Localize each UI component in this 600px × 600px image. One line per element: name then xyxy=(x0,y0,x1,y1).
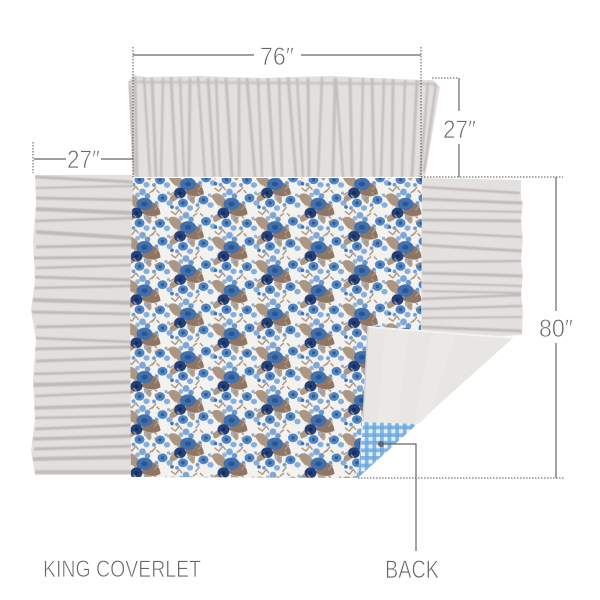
label: king coverlet: KING COVERLET xyxy=(43,556,201,583)
dimension: 80 inch length: 80″ xyxy=(539,315,573,343)
gingham back fabric xyxy=(358,422,417,478)
dimension: 76 inch width: 76″ xyxy=(260,43,294,71)
label: back: BACK xyxy=(385,556,439,584)
dimension: 76 inch width xyxy=(133,43,421,177)
panel: left ruffle xyxy=(31,175,133,475)
dimension: 27 inch side ruffle width: 27″ xyxy=(67,146,100,174)
callout: back leader line xyxy=(378,441,416,551)
panel: top ruffle xyxy=(128,75,440,177)
dimension: 27 inch top ruffle height: 27″ xyxy=(443,116,476,144)
dimension: 27 inch side ruffle width xyxy=(33,142,133,174)
panel: floral centre xyxy=(130,178,422,478)
dimension: 27 inch top ruffle height xyxy=(421,78,563,177)
panel: right ruffle xyxy=(421,178,523,340)
panel: folded corner back xyxy=(358,327,513,478)
